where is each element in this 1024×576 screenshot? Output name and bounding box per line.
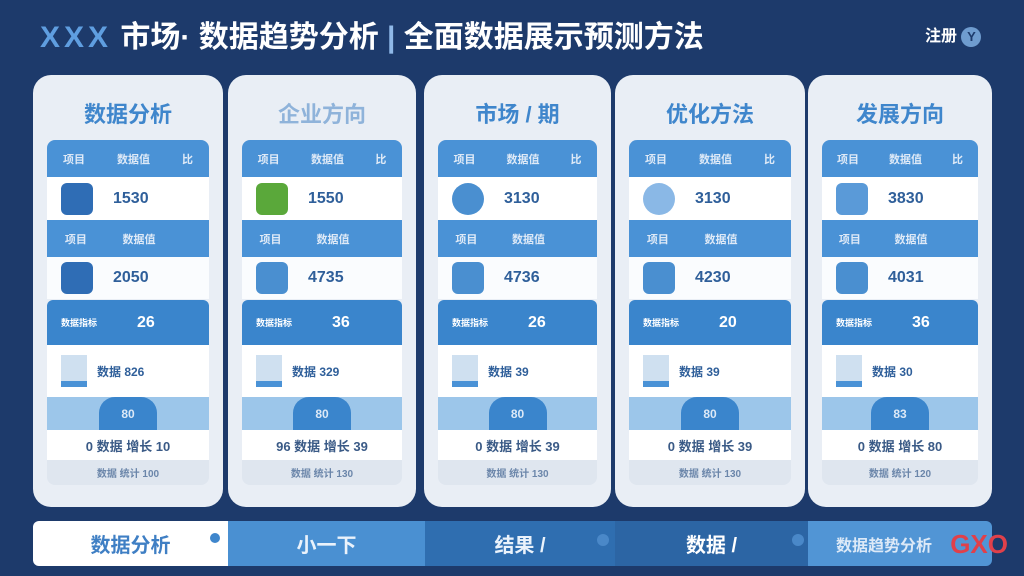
panel: card 5: 数据指标 [836,318,872,328]
panel: card 1: 26 [137,314,155,330]
bottom navigation bar [33,521,1008,566]
bottom navigation bar: 数据分析 [90,535,170,557]
title: XXX 市场· 数据趋势分析 | 全面数据展示预测方法 [40,21,704,54]
panel: card 3: 项目 [454,154,476,166]
panel: card 5: 36 [912,314,930,330]
panel: card 5: 83 [893,406,907,420]
panel: card 2: 36 [332,314,350,330]
panel: card 1: 数据值 [122,234,155,246]
panel: card 3: 数据值 [506,154,540,166]
panel: card 2: 项目 [260,234,282,246]
panel: card 3: 4736 [504,269,540,286]
icon: user [925,27,981,47]
panel: card 3: 比 [570,154,582,166]
panel: card 1: 项目 [65,234,87,246]
panel: card 5: 比 [952,154,963,166]
panel: card 5: 数据 30 [872,364,913,378]
panel: card 2: 1550 [308,190,344,206]
panel: card 4: 数据值 [699,154,732,166]
panel: card 3: 数据 统计 130 [486,469,549,480]
bottom navigation bar: 结果 / [494,535,546,557]
panel: card 1: 数据 统计 100 [97,469,159,480]
icon: user: Y [967,29,976,44]
panel: card 2: 数据值 [316,234,350,246]
panel: card 3: 3130 [504,190,540,206]
panel: card 3: 数据 39 [488,364,529,378]
panel: card 4: 数据 39 [679,364,720,378]
panel: card 4: 4230 [695,269,731,286]
panel: card 3: 26 [528,314,546,330]
panel: card 5: 0 数据 增长 80 [858,438,942,454]
panel: card 2 [228,75,416,507]
panel: card 5: 数据 统计 120 [869,469,931,480]
panel: card 4: 20 [719,314,737,330]
panel: card 1: 80 [121,406,135,420]
panel: card 5: 3830 [888,190,924,206]
panel: card 2: 4735 [308,269,344,286]
panel: card 4: 项目 [645,154,667,166]
panel: card 2: 比 [375,154,386,166]
card title: 优化方法 [666,102,754,127]
panel: card 5: 数据值 [894,234,927,246]
panel: card 5: 项目 [837,154,859,166]
card title: 数据分析 [84,102,172,127]
panel: card 4: 数据指标 [643,318,679,328]
panel: card 1: 比 [182,154,193,166]
panel: card 3 [424,75,611,507]
panel: card 1: 数据指标 [61,318,97,328]
panel: card 2: 项目 [258,154,280,166]
panel: card 4: 80 [703,406,717,420]
panel: card 3: 80 [511,406,524,420]
icon: user: 注册 [925,28,957,45]
bottom navigation bar: 数据 / [686,535,737,557]
panel: card 4 [615,75,805,507]
panel: card 1: 数据 826 [97,364,144,378]
panel: card 1: 0 数据 增长 10 [86,438,170,454]
panel: card 4: 0 数据 增长 39 [668,438,752,454]
panel: card 2: 96 数据 增长 39 [276,438,368,454]
panel: card 3: 数据指标 [452,318,488,328]
bottom navigation bar: 小一下 [296,535,356,557]
card title: 企业方向 [278,102,366,127]
bottom navigation bar: GXO [950,529,1008,559]
panel: card 1 [33,75,223,507]
panel: card 3: 数据值 [512,234,545,246]
panel: card 4: 数据值 [704,234,737,246]
panel: card 5: 项目 [839,234,861,246]
panel: card 4: 3130 [695,190,731,206]
panel: card 5: 数据值 [889,154,922,166]
panel: card 1: 2050 [113,269,149,286]
panel: card 3: 项目 [455,234,477,246]
card title: 市场 / 期 [475,102,560,127]
panel: card 2: 数据 统计 130 [291,469,353,480]
panel: card 1: 1530 [113,190,149,206]
bottom navigation bar: 数据趋势分析 [836,538,932,554]
panel: card 2: 数据 329 [292,364,339,378]
panel: card 1: 项目 [63,154,85,166]
panel: card 4: 数据 统计 130 [679,469,741,480]
panel: card 2: 数据指标 [256,318,292,328]
panel: card 2: 数据值 [311,154,344,166]
panel: card 1: 数据值 [117,154,150,166]
panel: card 4: 比 [764,154,775,166]
panel: card 5 [808,75,992,507]
panel: card 3: 0 数据 增长 39 [475,438,560,454]
panel: card 5: 4031 [888,269,924,286]
card title: 发展方向 [856,102,944,127]
panel: card 2: 80 [315,406,329,420]
panel: card 4: 项目 [647,234,669,246]
